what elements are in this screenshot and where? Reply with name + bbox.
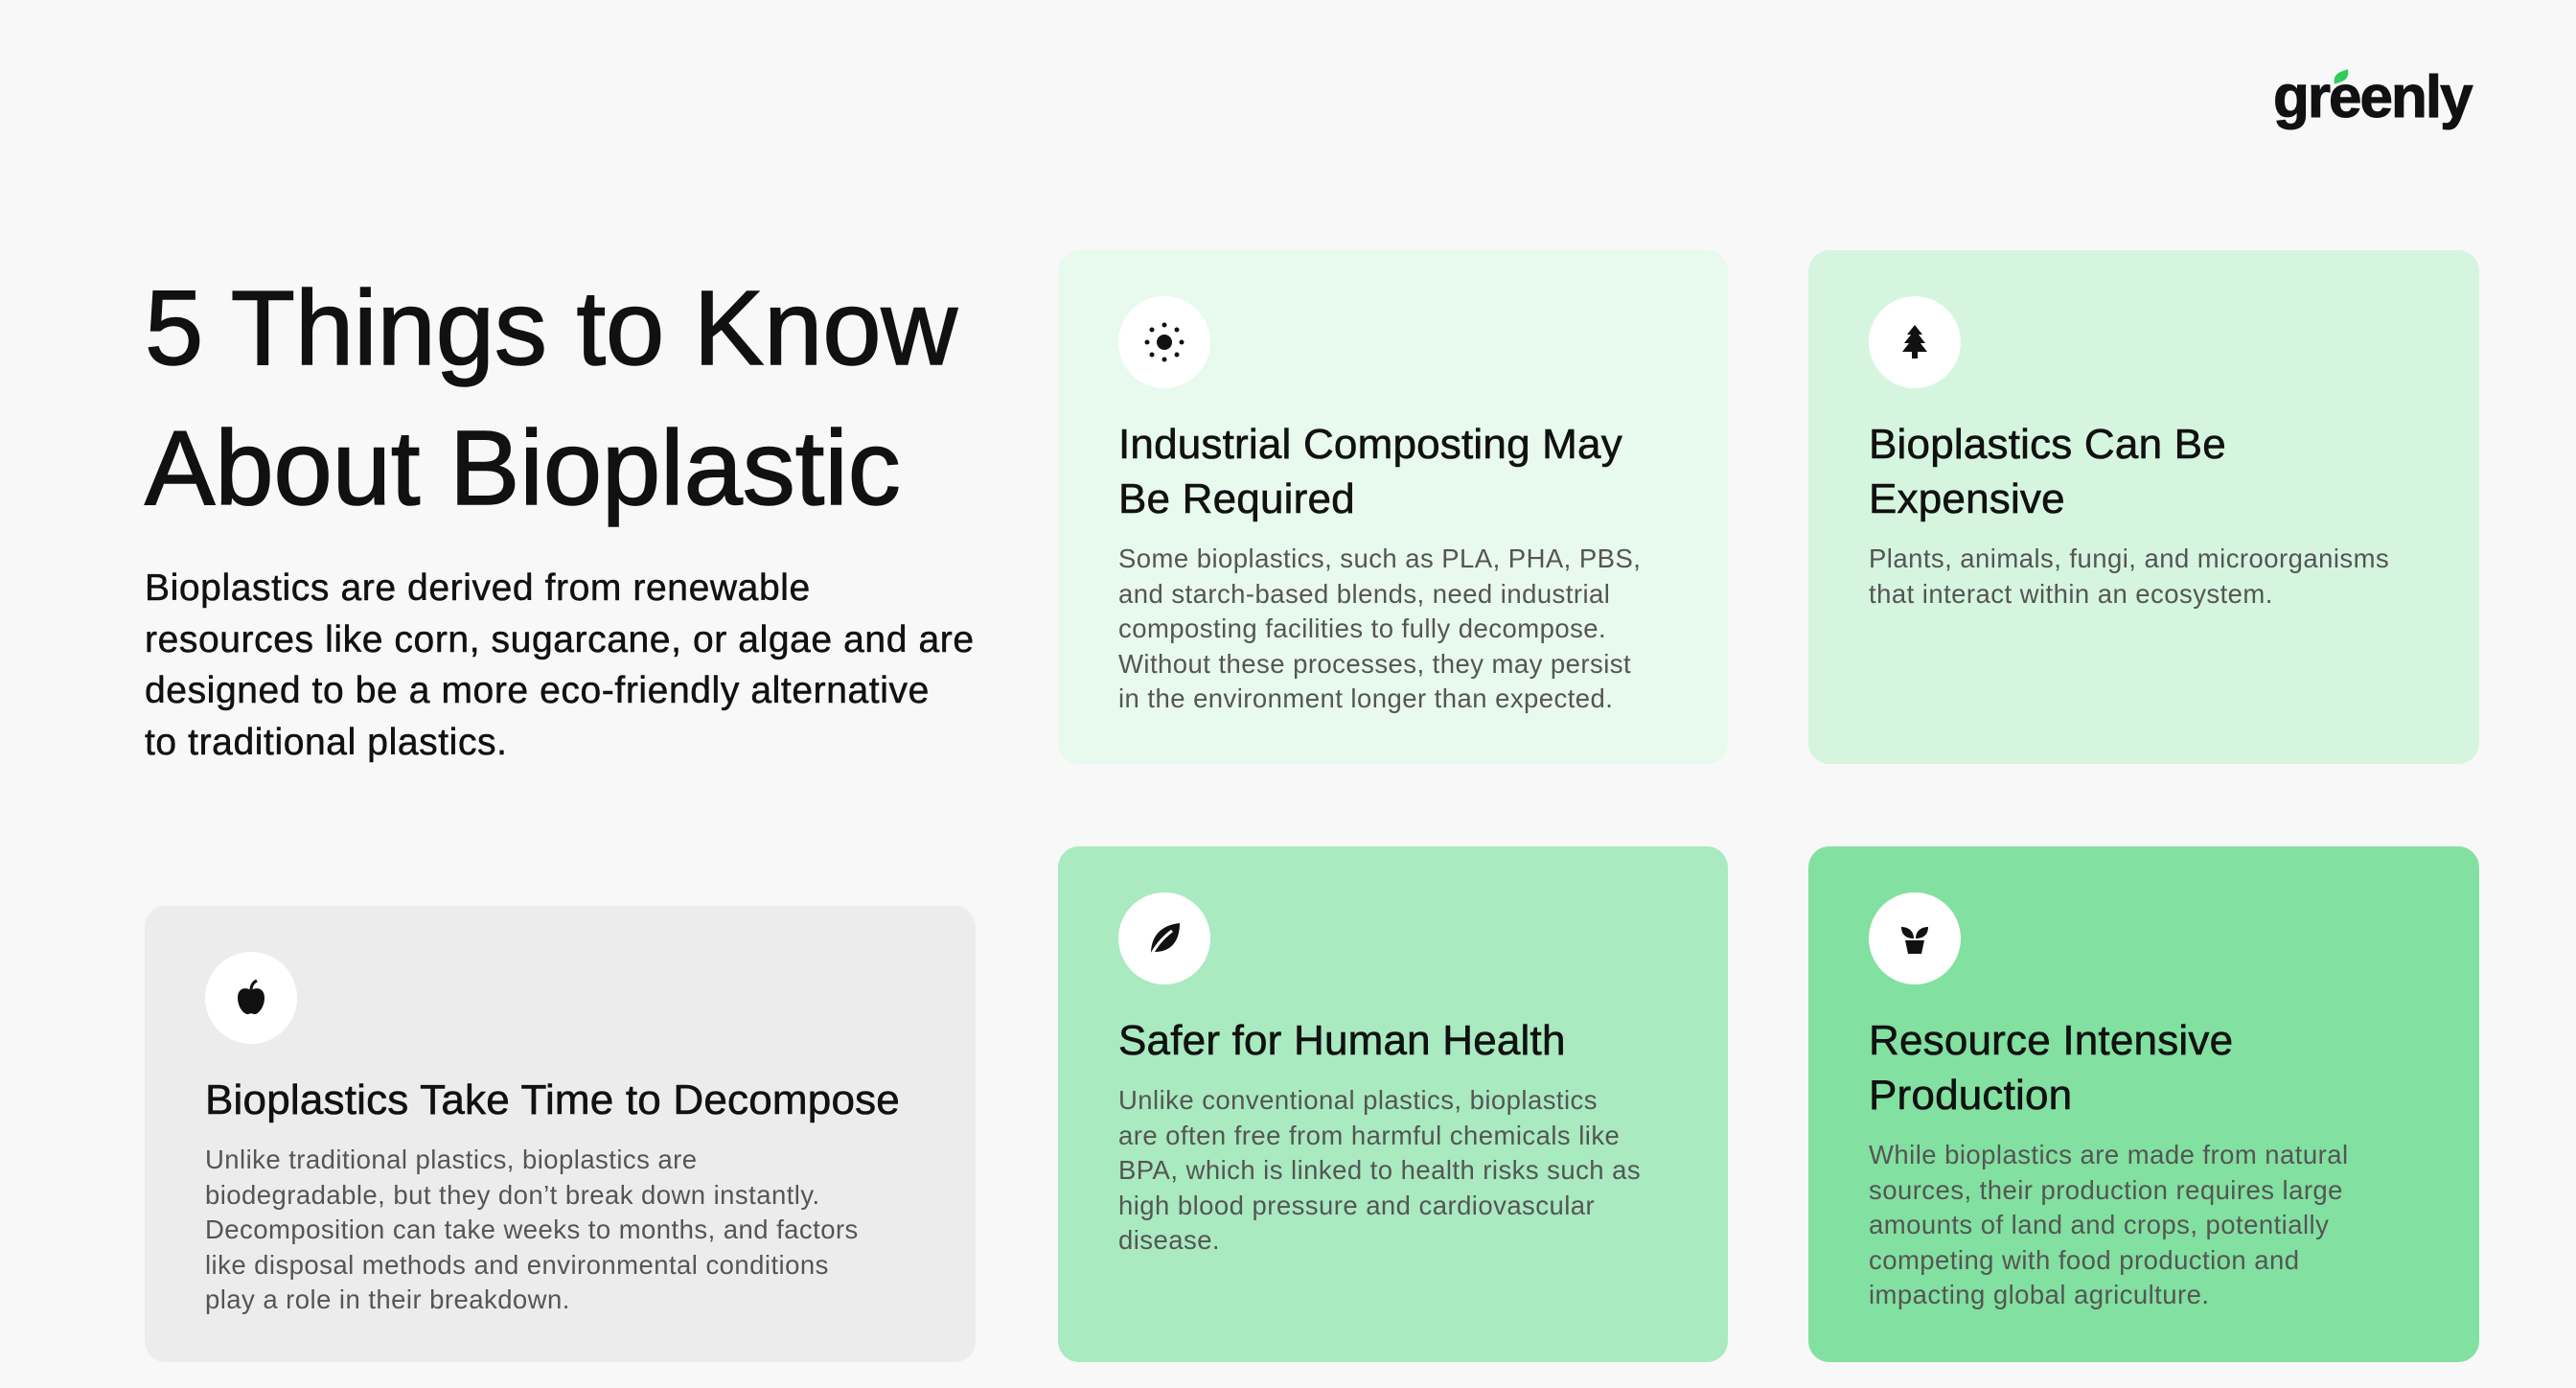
- body text: [1869, 544, 2389, 609]
- body text: While bioplastics are made from natural: [1869, 1140, 2349, 1169]
- body text: disease.: [1118, 1225, 1220, 1255]
- intro text: [145, 567, 975, 763]
- intro text: Bioplastics are derived from renewable: [145, 567, 811, 609]
- intro text: to traditional plastics.: [145, 721, 508, 763]
- body text: biodegradable, but they don’t break down instantly.: [205, 1179, 820, 1210]
- body text: that interact within an ecosystem.: [1869, 579, 2273, 608]
- body text: Unlike traditional plastics, bioplastics are: [205, 1145, 698, 1174]
- intro text: designed to be a more eco-friendly alternative: [145, 670, 930, 711]
- panel: expensive: [1808, 250, 2479, 764]
- heading: [1869, 1017, 2233, 1119]
- body text: are often free from harmful chemicals like: [1118, 1120, 1620, 1150]
- body text: [1118, 544, 1641, 713]
- body text: like disposal methods and environmental conditions: [205, 1250, 829, 1279]
- body text: competing with food production and: [1869, 1244, 2299, 1275]
- body text: play a role in their breakdown.: [205, 1284, 570, 1314]
- title: About Bioplastic: [145, 409, 901, 527]
- heading: Safer for Human Health: [1118, 1017, 1566, 1064]
- heading: Expensive: [1869, 475, 2065, 522]
- body text: and starch-based blends, need industrial: [1118, 579, 1610, 608]
- panel: safer health: [1058, 846, 1728, 1362]
- icon: sun: [1118, 296, 1210, 388]
- panel: industrial composting: [1058, 250, 1728, 764]
- body text: sources, their production requires large: [1869, 1175, 2343, 1204]
- body text: Plants, animals, fungi, and microorganisms: [1869, 544, 2389, 573]
- body text: in the environment longer than expected.: [1118, 683, 1613, 713]
- body text: Some bioplastics, such as PLA, PHA, PBS,: [1118, 544, 1641, 573]
- title: [144, 269, 958, 527]
- heading: Be Required: [1118, 475, 1355, 522]
- heading: Bioplastics Take Time to Decompose: [205, 1076, 900, 1123]
- intro text: resources like corn, sugarcane, or algae and are: [145, 619, 975, 659]
- heading: [1118, 421, 1623, 522]
- heading: Resource Intensive: [1869, 1017, 2233, 1064]
- heading: [1869, 421, 2226, 522]
- panel: decompose: [145, 906, 976, 1362]
- body text: BPA, which is linked to health risks such as: [1118, 1155, 1641, 1185]
- body text: [1869, 1140, 2349, 1309]
- icon: apple: [205, 952, 297, 1044]
- body text: amounts of land and crops, potentially: [1869, 1210, 2329, 1239]
- body text: [205, 1145, 859, 1314]
- heading: Production: [1869, 1072, 2072, 1119]
- icon: sprout pot: [1869, 892, 1961, 984]
- body text: Unlike conventional plastics, bioplastics: [1118, 1085, 1598, 1115]
- panel: resource intensive: [1808, 846, 2479, 1362]
- body text: impacting global agriculture.: [1869, 1280, 2209, 1309]
- heading: Industrial Composting May: [1118, 421, 1622, 468]
- title: 5 Things to Know: [145, 269, 957, 387]
- heading: Bioplastics Can Be: [1869, 421, 2226, 468]
- icon: leaf: [1118, 892, 1210, 984]
- body text: Decomposition can take weeks to months, and factors: [205, 1214, 859, 1244]
- body text: Without these processes, they may persist: [1118, 648, 1631, 679]
- body text: [1118, 1085, 1641, 1255]
- logo: greenly: [2273, 64, 2472, 130]
- icon: tree: [1869, 296, 1961, 388]
- body text: high blood pressure and cardiovascular: [1118, 1191, 1595, 1219]
- body text: composting facilities to fully decompose.: [1118, 613, 1606, 643]
